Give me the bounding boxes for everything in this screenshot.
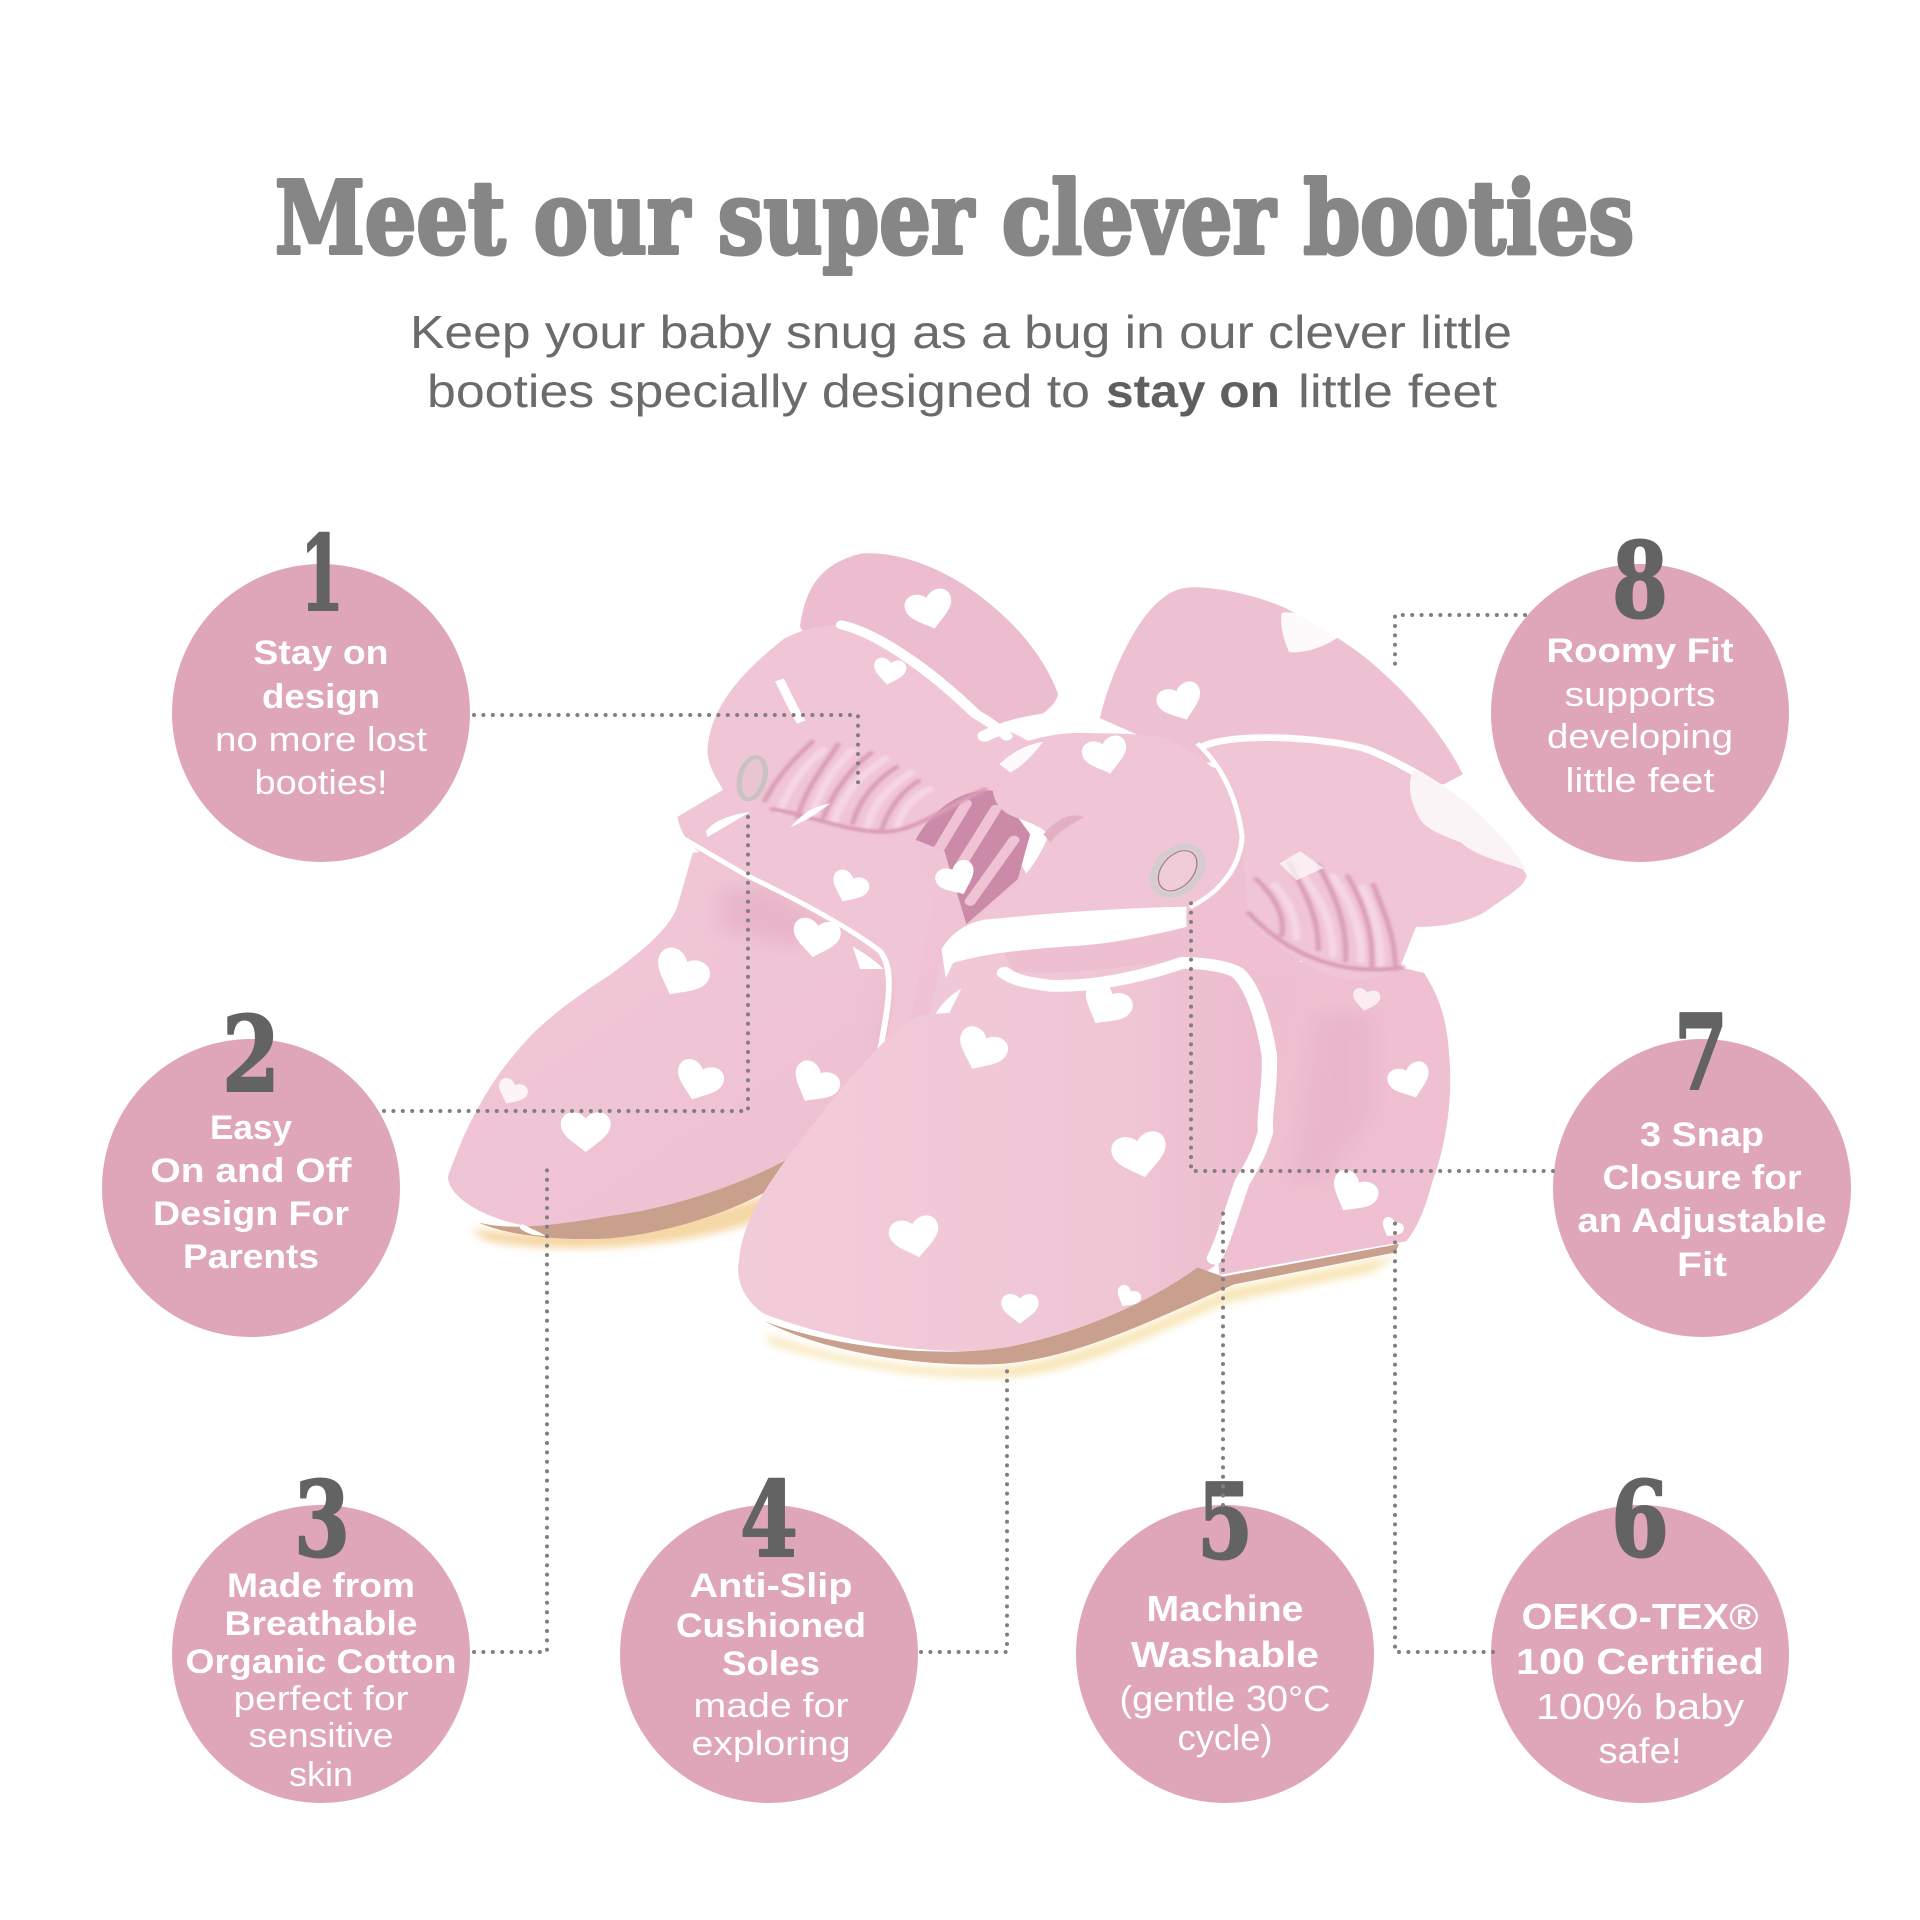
left boot lower body <box>448 834 1029 1228</box>
text 2: Easy <box>210 1109 292 1147</box>
text 4: Anti-Slip <box>690 1567 852 1605</box>
text 7: Fit <box>1677 1246 1727 1284</box>
text 3: perfect for <box>234 1680 408 1718</box>
right boot edging <box>1005 930 1269 1259</box>
right boot front panel <box>1186 909 1299 1272</box>
left boot soft shading <box>721 885 889 1149</box>
subtitle <box>410 306 1512 417</box>
text 1: no more lost <box>215 721 428 759</box>
text 8: supports <box>1564 676 1716 714</box>
text 2: Design For <box>153 1195 349 1233</box>
callout 7: 3 snap closure <box>1553 991 1851 1337</box>
number 8: 8 <box>1612 519 1668 642</box>
text 3: Organic Cotton <box>186 1643 456 1681</box>
text 8 <box>1546 632 1734 800</box>
dotted leader lines <box>384 615 1553 1652</box>
dark inner creases <box>916 790 1030 924</box>
callout 6: oeko-tex certified <box>1491 1458 1789 1803</box>
text 3: skin <box>289 1756 353 1794</box>
text 6: OEKO-TEX® <box>1522 1596 1758 1637</box>
left boot gathers <box>765 742 985 832</box>
callout 2: easy on and off <box>102 993 400 1337</box>
number 7: 7 <box>1674 991 1728 1114</box>
right boot snap tab <box>941 733 1242 978</box>
text 7 <box>1578 1116 1826 1284</box>
right boot hearts <box>887 976 1172 1324</box>
text 5: Machine <box>1146 1588 1304 1629</box>
left boot far cuff <box>800 553 1058 756</box>
right boot cuff <box>1183 733 1527 980</box>
text 2: On and Off <box>150 1152 352 1190</box>
subtitle: little feet <box>1298 365 1497 417</box>
right boot snap <box>1143 840 1212 901</box>
callout 1: stay on design <box>172 512 470 862</box>
circle 2 <box>102 1039 400 1337</box>
text 5: Washable <box>1131 1634 1319 1675</box>
text 1: Stay on <box>254 634 388 672</box>
right boot heel body <box>1197 958 1450 1275</box>
text 1: booties! <box>254 764 388 802</box>
subtitle: Keep your baby snug as a bug in our clever little <box>410 306 1512 358</box>
text 4 <box>676 1567 866 1763</box>
circle 8 <box>1491 564 1789 862</box>
heel soft shading <box>1293 1014 1373 1182</box>
text 8: developing <box>1547 718 1733 756</box>
text 3: sensitive <box>248 1717 394 1755</box>
number 3: 3 <box>294 1458 350 1581</box>
text 4: made for <box>694 1687 848 1725</box>
ground shadows <box>471 1188 1395 1378</box>
number 1: 1 <box>300 512 344 635</box>
right boot far cuff <box>1100 587 1463 784</box>
text 5: (gentle 30°C <box>1120 1678 1330 1719</box>
text 7: an Adjustable <box>1578 1202 1826 1240</box>
text 6 <box>1516 1596 1764 1771</box>
text 6: 100% baby <box>1536 1686 1744 1727</box>
subtitle: stay on <box>1106 365 1280 417</box>
text 7: Closure for <box>1602 1159 1802 1197</box>
text 5 <box>1120 1588 1330 1758</box>
right boot sole <box>765 1244 1399 1365</box>
circle 5 <box>1076 1505 1374 1803</box>
text 1: design <box>262 678 380 716</box>
left boot sole <box>479 1151 801 1239</box>
text 8: Roomy Fit <box>1546 632 1734 670</box>
subtitle: booties specially designed to <box>427 365 1090 417</box>
callout 5: machine washable <box>1076 1460 1374 1803</box>
left boot hearts <box>493 916 844 1198</box>
circle 1 <box>172 564 470 862</box>
image: pair of pink heart-print baby booties <box>448 553 1527 1378</box>
text 3: Breathable <box>224 1605 418 1643</box>
left boot trim <box>842 625 1007 736</box>
right boot front body <box>738 927 1271 1351</box>
text 6: 100 Certified <box>1516 1641 1764 1682</box>
callout 4: anti-slip soles <box>620 1458 918 1803</box>
text 6: safe! <box>1598 1730 1682 1771</box>
right boot gathers <box>1249 862 1403 970</box>
circle 3 <box>172 1505 470 1803</box>
text 1 <box>215 634 428 802</box>
circle 4 <box>620 1505 918 1803</box>
number 5: 5 <box>1197 1460 1253 1583</box>
text 4: exploring <box>692 1725 850 1763</box>
callout 3: organic cotton <box>172 1458 470 1803</box>
circle 6 <box>1491 1505 1789 1803</box>
number 6: 6 <box>1611 1458 1669 1581</box>
text 8: little feet <box>1566 762 1715 800</box>
left boot snap <box>735 755 769 801</box>
number 2: 2 <box>222 993 280 1116</box>
title: Meet our super clever booties <box>275 159 1634 277</box>
number 4: 4 <box>740 1458 798 1581</box>
text 3 <box>186 1567 456 1794</box>
text 7: 3 Snap <box>1640 1116 1764 1154</box>
text 2: Parents <box>183 1238 319 1276</box>
callout 8: roomy fit <box>1491 519 1789 862</box>
text 5: cycle) <box>1178 1717 1272 1758</box>
left boot strap panel <box>677 625 1065 1092</box>
text 3: Made from <box>227 1567 415 1605</box>
circle 7 <box>1553 1039 1851 1337</box>
text 4: Soles <box>722 1645 820 1683</box>
text 4: Cushioned <box>676 1607 866 1645</box>
text 2 <box>150 1109 352 1276</box>
